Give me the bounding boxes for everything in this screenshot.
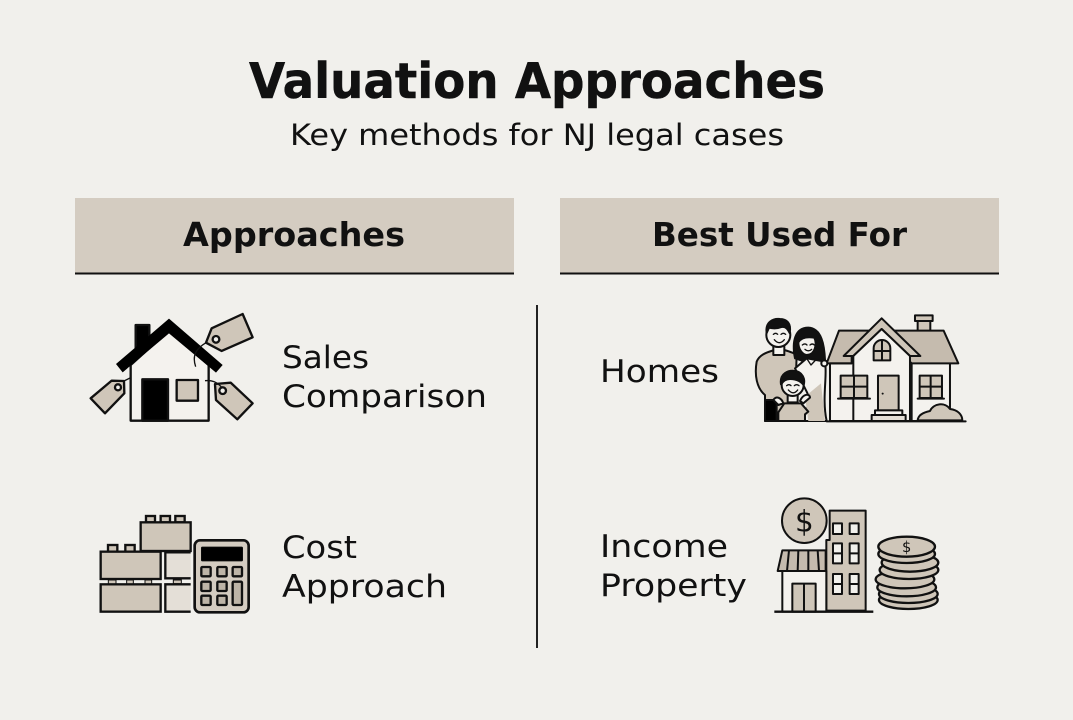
label: cost approach: Cost [282,530,357,566]
label: income property [600,529,747,604]
panel heading: approaches: Approaches [183,215,405,254]
label: homes: Homes [600,354,719,390]
icon: family and house [756,315,966,421]
man [756,350,797,421]
icon: storefront, building and coins [774,498,938,612]
label: income property: Property [600,568,747,604]
icon: storefront, building and coins: $ [902,539,911,556]
house [830,363,950,421]
panel heading: best used for [560,198,999,274]
icon: house with price tags [91,314,253,421]
label: cost approach [282,530,447,605]
tower [826,511,866,611]
label: sales comparison [282,340,487,415]
icon: building blocks and calculator [101,516,249,612]
label: sales comparison: Sales [282,340,369,376]
woman [794,328,825,363]
title: Valuation Approaches [249,53,825,110]
subtitle: Key methods for NJ legal cases [290,118,784,152]
store [782,571,826,612]
panel heading: best used for: Best Used For [652,215,908,254]
label: sales comparison: Comparison [282,379,487,415]
icon: storefront, building and coins: $ [795,504,814,538]
center divider [536,305,538,648]
label: income property: Income [600,529,728,565]
dollar coin [782,498,827,543]
boy [778,403,808,421]
panel heading: approaches [75,198,514,274]
label: cost approach: Approach [282,569,447,605]
coins [876,537,938,609]
